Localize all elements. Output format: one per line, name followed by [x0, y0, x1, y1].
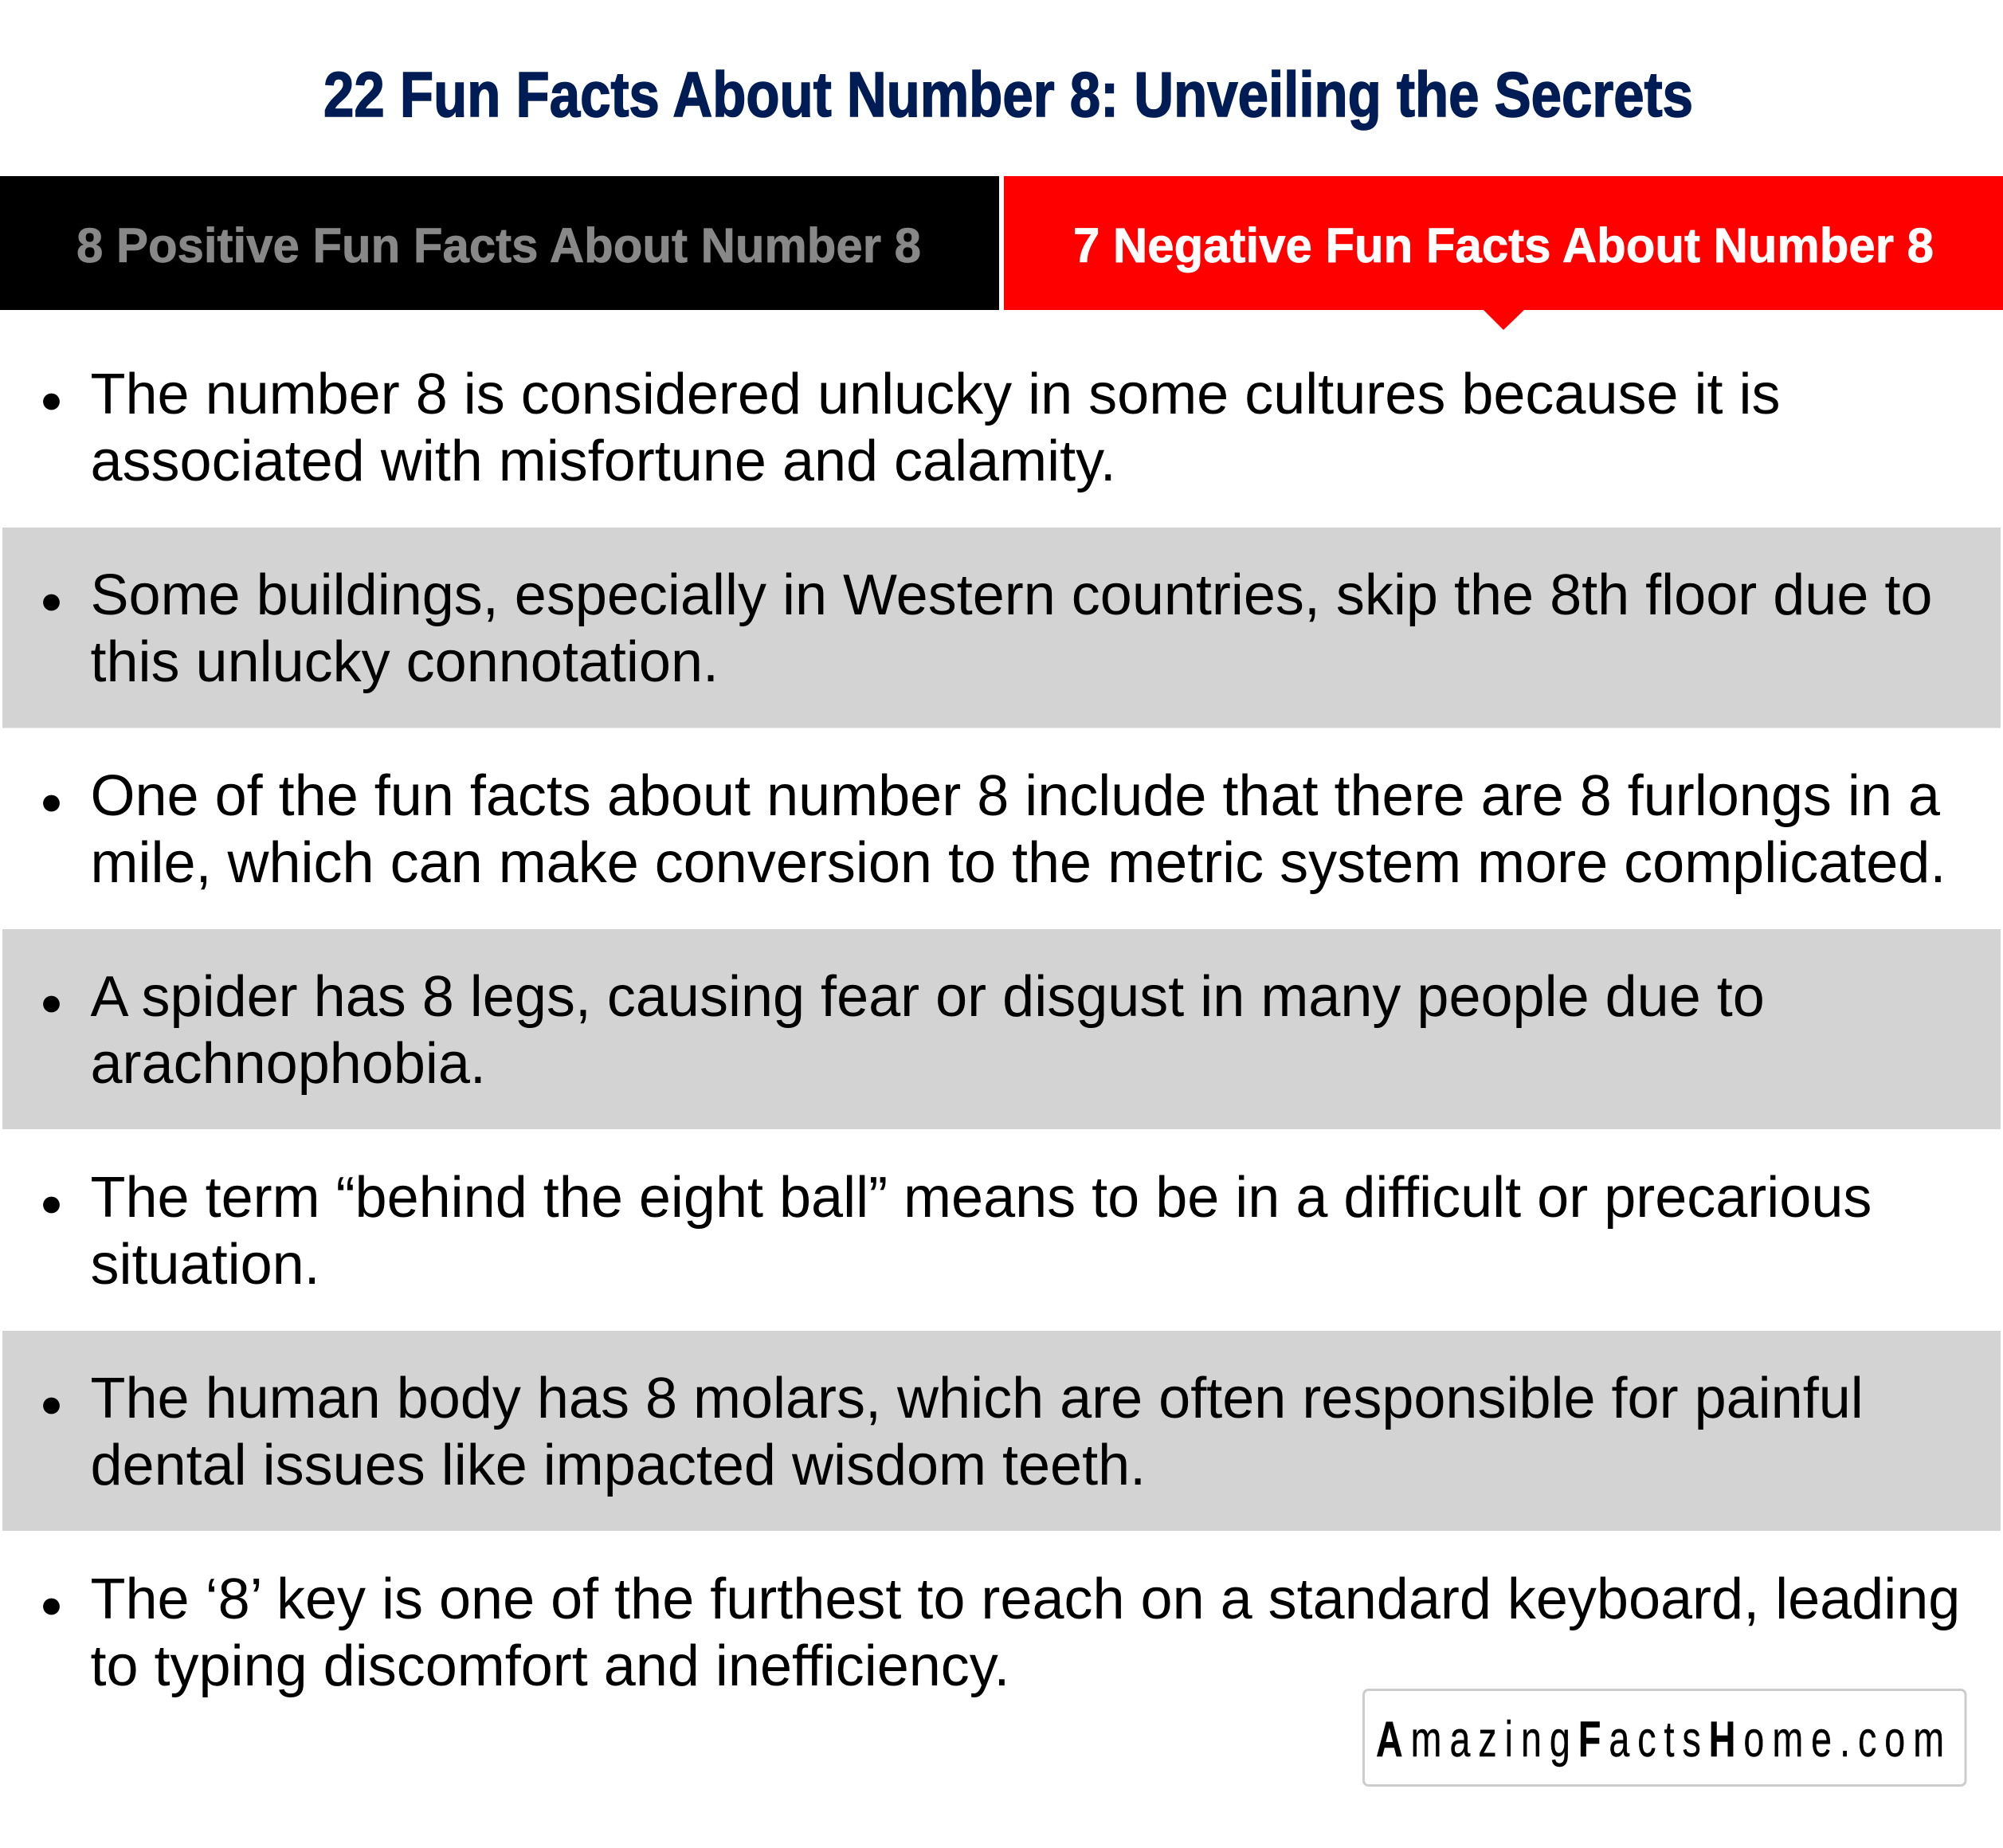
fact 1 [43, 363, 1781, 493]
fact 6 [2, 1331, 2001, 1531]
logo: AmazingFactsHome.com [1364, 1689, 1966, 1785]
fact 6: The human body has 8 molars, which are often responsible for painful [91, 1367, 1864, 1430]
fact 5 [43, 1166, 1872, 1297]
tab: positive facts [0, 176, 999, 310]
fact 4: arachnophobia. [91, 1032, 486, 1096]
fact 7: The ‘8’ key is one of the furthest to reach on a standard keyboard, leading [91, 1567, 1960, 1631]
fact 3 [43, 764, 1946, 895]
fact 4 [2, 929, 2001, 1129]
title: 22 Fun Facts About Number 8: Unveiling the Secrets [323, 59, 1693, 130]
fact 3: mile, which can make conversion to the metric system more complicated. [91, 831, 1946, 895]
fact 6: dental issues like impacted wisdom teeth. [91, 1434, 1146, 1497]
fact 5: situation. [91, 1233, 320, 1297]
tab: positive facts: 8 Positive Fun Facts About Number 8 [76, 218, 921, 273]
logo: AmazingFactsHome.com: AmazingFactsHome.com [1376, 1711, 1952, 1768]
fact 2 [2, 528, 2001, 728]
fact 5: The term “behind the eight ball” means to be in a difficult or precarious [91, 1166, 1872, 1230]
fact 4: A spider has 8 legs, causing fear or disgust in many people due to [91, 965, 1765, 1029]
fact 3: One of the fun facts about number 8 include that there are 8 furlongs in a [91, 764, 1941, 828]
tab: negative facts: 7 Negative Fun Facts About Number 8 [1073, 218, 1934, 273]
fact 2: Some buildings, especially in Western countries, skip the 8th floor due to [91, 563, 1932, 627]
fact 1: The number 8 is considered unlucky in some cultures because it is [91, 363, 1781, 426]
tab: negative facts [1004, 176, 2003, 330]
fact 7 [43, 1567, 1960, 1698]
fact 7: to typing discomfort and inefficiency. [91, 1634, 1009, 1698]
fact 2: this unlucky connotation. [91, 630, 719, 694]
fact 1: associated with misfortune and calamity. [91, 430, 1116, 493]
